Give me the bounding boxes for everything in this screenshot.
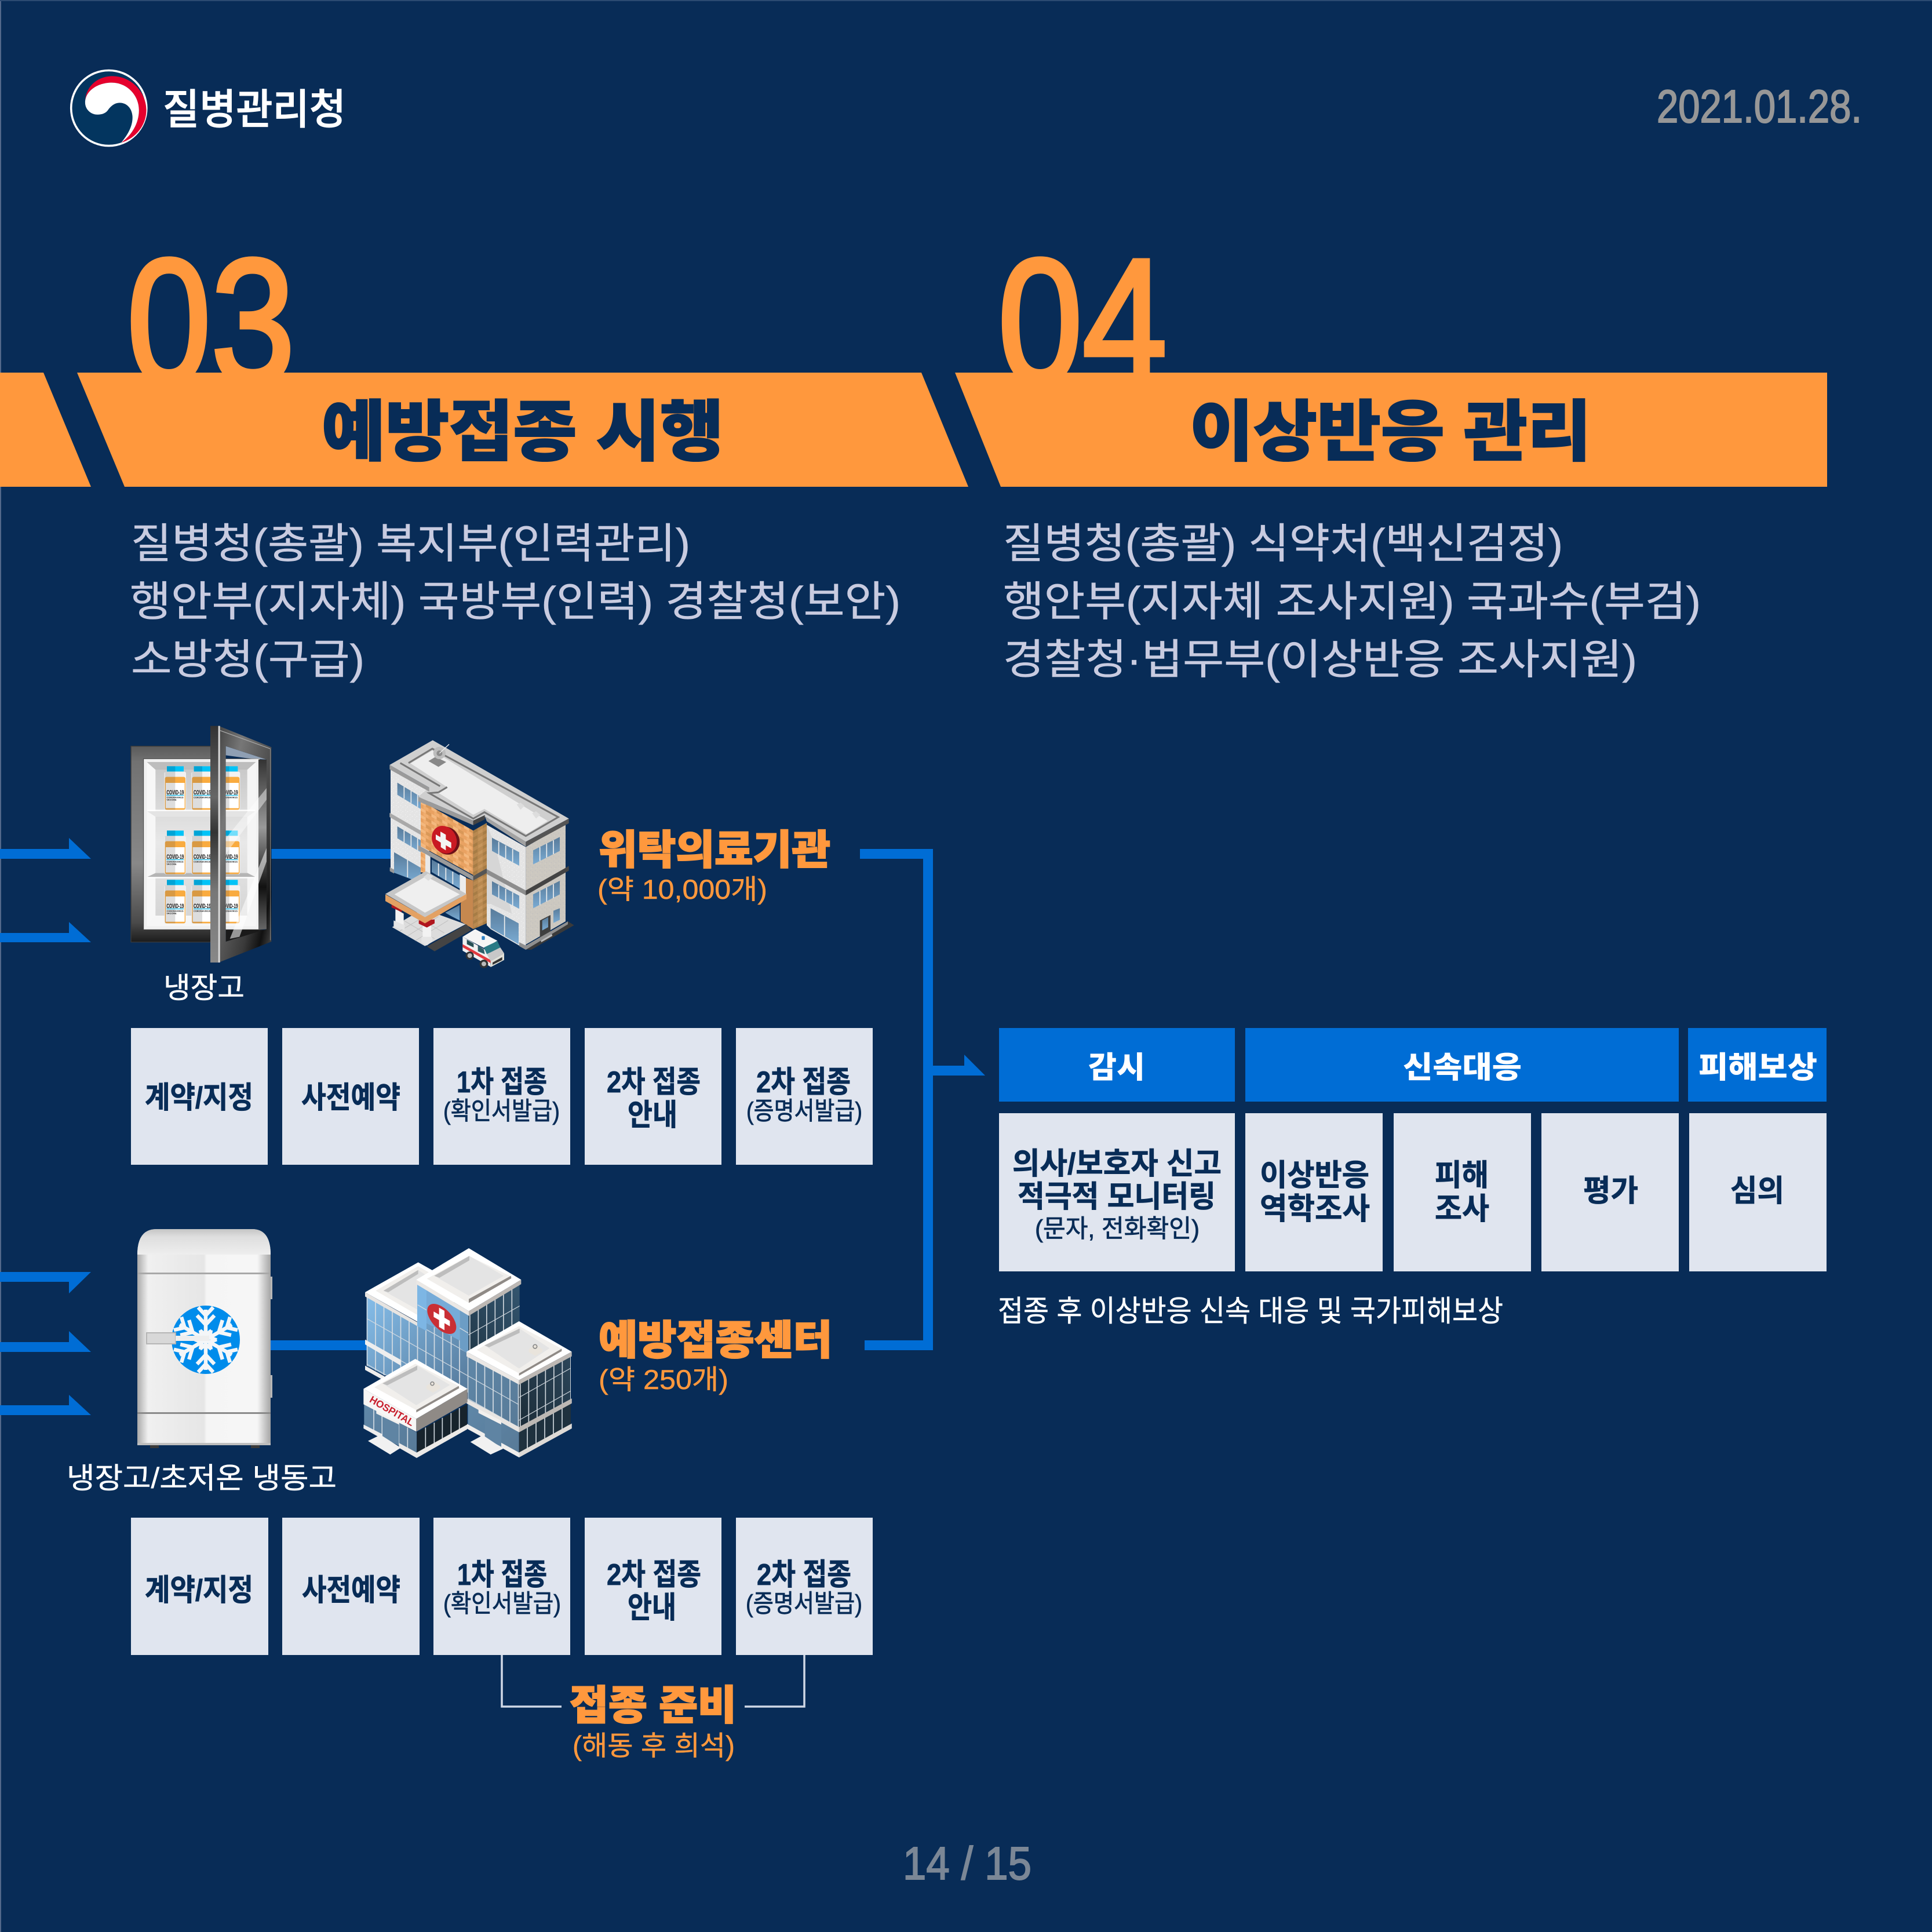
icon: glass door vaccine refrigerator: VACCINE (166, 912, 177, 915)
process steps row 2: (확인서발급) (443, 1590, 561, 1618)
process steps row 1: 1차 접종 (457, 1066, 547, 1099)
label: vaccination center (599, 1318, 832, 1395)
heading band 03: vaccination: 예방접종 시행 (322, 396, 724, 469)
heading band 04: adverse reaction management: 이상반응 관리 (1190, 396, 1591, 469)
icon: glass door vaccine refrigerator (131, 726, 271, 963)
process steps row 2: (증명서발급) (746, 1590, 862, 1618)
icon: glass door vaccine refrigerator: VACCINE (166, 799, 177, 801)
table cell: doctor report monitoring: (문자, 전화확인) (1035, 1215, 1200, 1243)
table cell: epidemiological survey (1245, 1113, 1383, 1271)
icon: glass door vaccine refrigerator: COVID-19 (166, 903, 184, 910)
table cell: damage investigation: 피해 (1435, 1159, 1489, 1193)
process steps row 1: 사전예약 (301, 1081, 400, 1115)
label: vaccination center: (약 250개) (599, 1364, 728, 1395)
table cell: doctor report monitoring: 의사/보호자 신고 (1012, 1147, 1222, 1181)
caption: adverse reaction table: 접종 후 이상반응 신속 대응 및 국가피해보상 (998, 1295, 1503, 1328)
callout: vaccination preparation: 접종 준비 (570, 1683, 737, 1728)
table header: surveillance (999, 1028, 1235, 1102)
agencies text block: section 04: 질병청(총괄) 식약처(백신검정) (1003, 521, 1563, 567)
agencies text block: section 03: 행안부(지자체) 국방부(인력) 경찰청(보안) (130, 579, 901, 625)
process steps row 2: 안내 (628, 1591, 676, 1625)
process steps row 1: 계약/지정 (145, 1081, 253, 1115)
process steps row 2: 계약/지정 (145, 1574, 253, 1607)
label: freezer: 냉장고/초저온 냉동고 (67, 1462, 337, 1494)
label: vaccination center: 예방접종센터 (599, 1318, 832, 1363)
icon: glass door vaccine refrigerator: CORONAVIRUS (194, 860, 211, 863)
process steps row 1: (확인서발급) (443, 1098, 560, 1125)
table header: rapid response (1245, 1028, 1679, 1102)
agencies text block: section 04: 경찰청·법무부(이상반응 조사지원) (1003, 637, 1637, 683)
table cell: epidemiological survey: 이상반응 (1260, 1159, 1369, 1193)
icon: glass door vaccine refrigerator: COVID-19 (166, 854, 184, 861)
connector: freezer to vaccination center (267, 1340, 371, 1350)
page number: 14 / 15 (903, 1838, 1031, 1889)
callout: vaccination preparation: (해동 후 희석) (573, 1730, 735, 1761)
icon: glass door vaccine refrigerator: COVID-19 (194, 789, 211, 796)
label: consigned medical institutions (597, 828, 830, 905)
icon: glass door vaccine refrigerator: VACCINE (166, 863, 177, 866)
process steps row 1: (증명서발급) (746, 1098, 862, 1125)
process steps row 1: 2차 접종 (756, 1066, 851, 1099)
icon: glass door vaccine refrigerator: CORONAVIRUS (194, 909, 211, 912)
process steps row 1: 2차 접종 (607, 1066, 701, 1099)
icon: glass door vaccine refrigerator: CORONAVIRUS (221, 860, 238, 863)
table cell: doctor report monitoring: 적극적 모니터링 (1018, 1180, 1216, 1214)
icon: glass door vaccine refrigerator: COVID-19 (166, 789, 184, 796)
agency name: 질병관리청 (163, 87, 346, 133)
table cell: deliberation (1689, 1113, 1827, 1271)
icon: glass door vaccine refrigerator: COVID-19 (221, 854, 238, 861)
arrow: lower incoming 2 (0, 1331, 91, 1352)
table cell: damage investigation (1394, 1113, 1531, 1271)
agencies text block: section 03 (130, 521, 901, 683)
process steps row 2: 사전예약 (302, 1574, 400, 1607)
icon: glass door vaccine refrigerator: CORONAVIRUS (166, 860, 184, 863)
agencies text block: section 03: 소방청(구급) (131, 637, 364, 683)
icon: glass door vaccine refrigerator: COVID-19 (221, 903, 238, 910)
connector arrow: both sites to adverse reaction table (860, 849, 985, 1350)
table: adverse reaction management (999, 1028, 1827, 1271)
label: refrigerator: 냉장고 (163, 972, 245, 1004)
icon: glass door vaccine refrigerator: CORONAVIRUS (166, 796, 184, 799)
icon: ultra-low temperature freezer (137, 1229, 272, 1448)
process steps row 2: 2차 접종 (607, 1558, 701, 1592)
table header: compensation: 피해보상 (1698, 1051, 1817, 1085)
agencies text block: section 04 (1003, 521, 1701, 683)
table cell: doctor report monitoring (999, 1113, 1235, 1271)
table cell: deliberation: 심의 (1730, 1175, 1784, 1208)
process steps row 2 (131, 1518, 873, 1655)
icon: glass door vaccine refrigerator: CORONAVIRUS (221, 909, 238, 912)
section number 04: 04 (998, 222, 1167, 420)
heading band: left stub (0, 373, 91, 487)
process steps row 2: 2차 접종 (757, 1558, 851, 1592)
agencies text block: section 04: 행안부(지자체 조사지원) 국과수(부검) (1003, 579, 1701, 625)
table cell: evaluation: 평가 (1583, 1175, 1638, 1208)
logo: Korea Disease Control and Prevention Agency (70, 70, 346, 147)
connector: fridge to consigned clinic (267, 849, 394, 859)
process steps row 1 (131, 1028, 873, 1165)
section number 03: 03 (127, 222, 295, 420)
date: 2021.01.28. (1657, 81, 1862, 132)
heading band 04: adverse reaction management (955, 373, 1827, 487)
label: consigned medical institutions: (약 10,000개) (597, 874, 767, 905)
icon: glass door vaccine refrigerator: COVID-19 (194, 903, 211, 910)
icon: isometric hospital complex: HOSPITAL (367, 1394, 417, 1428)
arrow: upper incoming 2 (0, 922, 91, 942)
icon: taegeuk emblem (70, 70, 148, 147)
table cell: evaluation (1541, 1113, 1679, 1271)
arrow: lower incoming 3 (0, 1395, 91, 1415)
table header: rapid response: 신속대응 (1403, 1051, 1522, 1085)
icon: glass door vaccine refrigerator: CORONAVIRUS (194, 796, 211, 799)
process steps row 2: 1차 접종 (457, 1558, 547, 1592)
arrow: lower incoming 1 (0, 1272, 91, 1293)
process steps row 1: 안내 (628, 1099, 677, 1132)
icon: glass door vaccine refrigerator: COVID-19 (221, 789, 238, 796)
callout: vaccination preparation (570, 1683, 737, 1761)
icon: glass door vaccine refrigerator: CORONAVIRUS (221, 796, 238, 799)
icon: isometric hospital complex (363, 1248, 572, 1458)
icon: glass door vaccine refrigerator: COVID-19 (194, 854, 211, 861)
label: consigned medical institutions: 위탁의료기관 (599, 828, 830, 873)
agencies text block: section 03: 질병청(총괄) 복지부(인력관리) (131, 521, 690, 567)
table cell: epidemiological survey: 역학조사 (1260, 1193, 1370, 1226)
table cell: damage investigation: 조사 (1435, 1193, 1489, 1226)
bracket: vaccination preparation (502, 1655, 804, 1707)
table header: surveillance: 감시 (1088, 1051, 1145, 1085)
arrow: upper incoming 1 (0, 838, 91, 859)
table header: compensation (1688, 1028, 1827, 1102)
heading band 03: vaccination (77, 373, 968, 487)
icon: isometric clinic building with ambulance (385, 740, 574, 968)
icon: glass door vaccine refrigerator: CORONAVIRUS (166, 909, 184, 912)
